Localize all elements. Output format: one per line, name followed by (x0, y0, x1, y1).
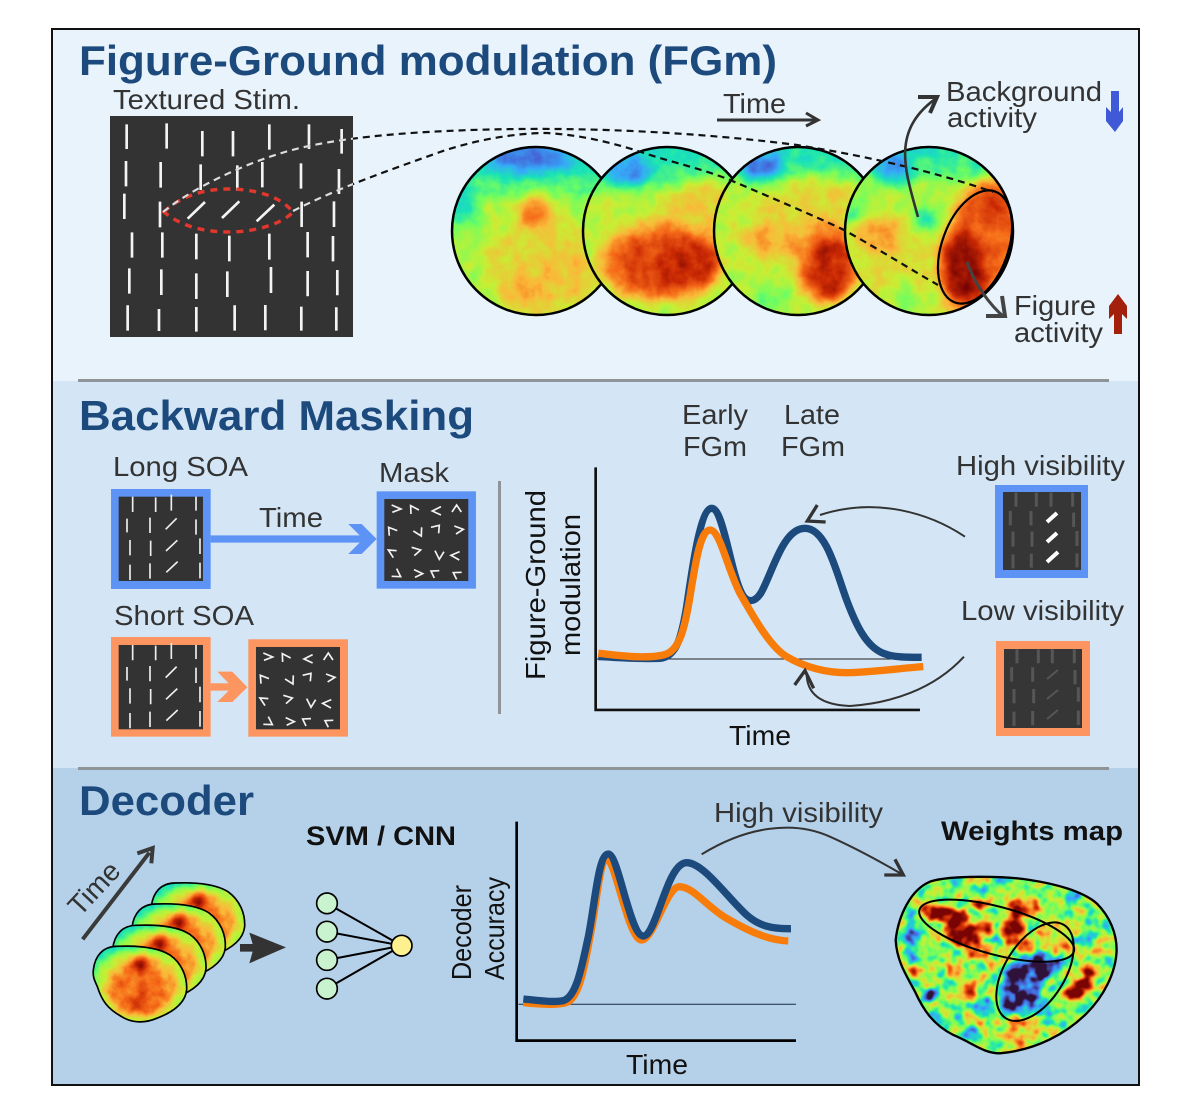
label: Time rotated: Time (62, 855, 126, 921)
y axis label: Decoder Accuracy (446, 877, 510, 980)
label: Long SOA: Long SOA (113, 451, 248, 482)
heatmap frame 4 (844, 146, 1014, 316)
high visibility stimulus (995, 485, 1088, 578)
heatmap frames over time (450, 146, 1014, 316)
figure outline (164, 189, 293, 232)
label: Background activity (946, 76, 1102, 133)
masking stimuli (111, 489, 476, 737)
label: Weights map: Weights map (941, 816, 1123, 846)
label: Background activity: Background (946, 76, 1102, 107)
arrow: short SOA (211, 672, 247, 702)
arrow: time diagonal (83, 848, 153, 939)
arrow: background pointer (905, 97, 938, 217)
panel: Figure-Ground modulation (53, 30, 1138, 381)
figure region ellipse (924, 180, 1026, 314)
label: Figure activity: Figure (1014, 290, 1096, 321)
red weights (917, 902, 973, 928)
long SOA stimulus (111, 489, 211, 589)
icon: blue down arrow (1106, 91, 1123, 132)
low visibility stimulus (996, 641, 1090, 736)
axis label: Time: Time (729, 720, 791, 751)
heading: Decoder: Decoder (79, 777, 254, 824)
labels: Early and Late FGm: Late (784, 399, 840, 430)
mask short (248, 639, 348, 737)
heading: Backward Masking: Backward Masking (79, 392, 474, 439)
labels: Early and Late FGm (682, 399, 845, 462)
y axis label: Decoder Accuracy: Decoder (446, 885, 477, 980)
neural network (317, 893, 412, 999)
axis label: Time decoder: Time (626, 1049, 688, 1080)
labels: Early and Late FGm: Early (682, 399, 748, 430)
label: High visibility: High visibility (956, 450, 1125, 481)
divider (498, 481, 501, 714)
decoder input and network (62, 848, 412, 1037)
chart: figure-ground modulation (596, 467, 965, 710)
label: Figure activity (1014, 290, 1103, 348)
y axis label: Figure-Ground modulation (520, 490, 586, 680)
weights map (894, 876, 1118, 1054)
cool patches (905, 921, 922, 939)
y axis label: Decoder Accuracy: Accuracy (479, 877, 510, 980)
arrow: high visibility to late peak (807, 505, 965, 537)
label: Time top: Time (723, 88, 786, 119)
arrow: high visibility to weights map (702, 828, 903, 875)
dark negative weights (1008, 953, 1065, 980)
icon: red up arrow (1109, 294, 1127, 334)
y axis label: Figure-Ground modulation: Figure-Ground (520, 490, 551, 680)
labels: Early and Late FGm: FGm (781, 431, 845, 462)
labels: Early and Late FGm: FGm (683, 431, 747, 462)
heatmap frame 1 (450, 146, 602, 316)
weight ellipses (913, 887, 1090, 1034)
heatmap frame 3 (712, 146, 864, 316)
warm patches (1037, 920, 1070, 953)
arrow: long SOA (211, 524, 377, 554)
label: SVM / CNN: SVM / CNN (306, 821, 456, 851)
label: Figure activity: activity (1014, 317, 1103, 348)
title: Figure-Ground modulation (FGm) (79, 37, 777, 84)
chart: decoder accuracy (517, 822, 903, 1041)
label: High visibility decoder: High visibility (714, 797, 883, 828)
label: Low visibility: Low visibility (961, 595, 1124, 626)
label: Mask: Mask (379, 457, 450, 488)
label: Textured Stim.: Textured Stim. (113, 84, 300, 115)
mask long (377, 491, 476, 589)
arrow: figure pointer (967, 262, 1005, 317)
textured stimulus (110, 116, 353, 337)
label: Time middle: Time (259, 502, 323, 533)
label: Background activity: activity (947, 102, 1037, 133)
dashed projection lines (163, 129, 993, 285)
panel: Decoder (53, 768, 1138, 1084)
arrow: to network (240, 933, 286, 963)
y axis label: Figure-Ground modulation: modulation (555, 514, 586, 656)
short SOA stimulus (111, 637, 211, 737)
panel: Backward Masking (53, 381, 1138, 769)
arrow: time (717, 113, 818, 126)
arrow: low visibility to orange curve (795, 657, 964, 706)
label: Short SOA: Short SOA (114, 600, 254, 631)
heatmap stack (77, 867, 261, 1037)
heatmap frame 2 (582, 146, 732, 316)
